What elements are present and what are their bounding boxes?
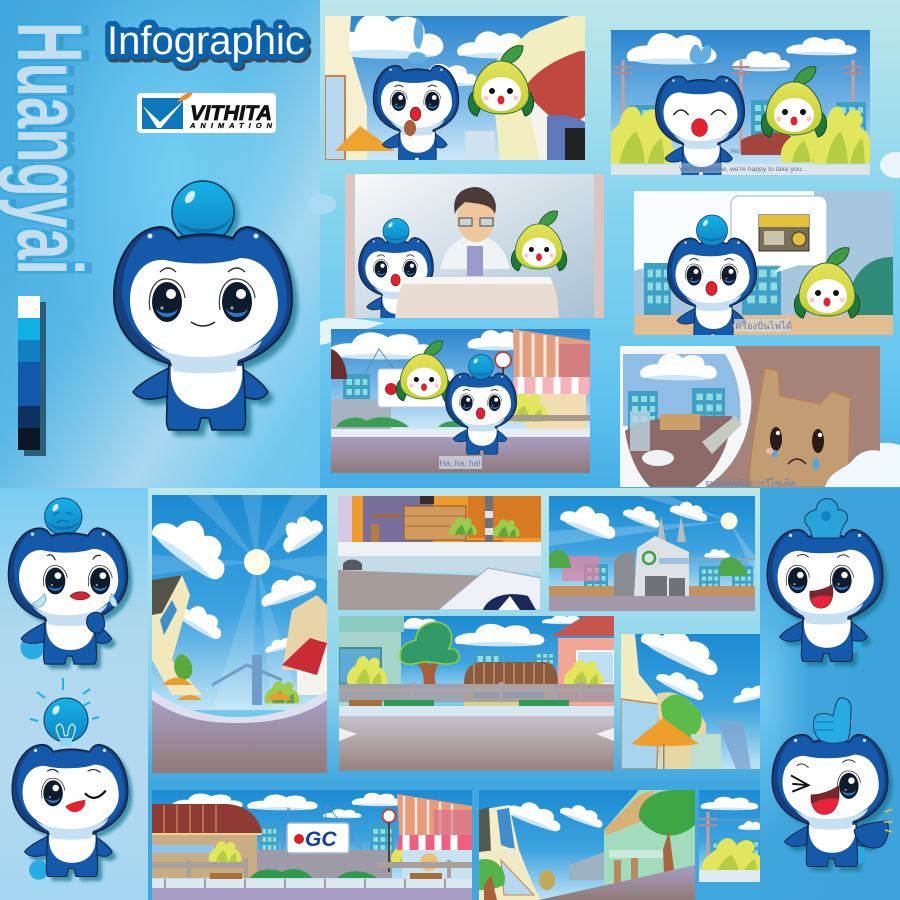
logo: Vithita Animation — [137, 92, 276, 133]
panel: scene 2 mascots waving with subtitle — [611, 30, 870, 175]
panel: background art 6 GC billboard street — [152, 790, 472, 900]
panel: background art 7 hillside street — [479, 790, 695, 900]
vertical title: Huangyai: Huangyai — [0, 22, 100, 275]
background: bottom right strip — [760, 488, 900, 900]
panel: scene 2 mascots waving with subtitle: You're welcome, we're happy to take you. — [679, 166, 803, 173]
heading: Infographic: Infographic — [109, 22, 307, 66]
logo: Vithita Animation: VITHITA — [190, 102, 272, 125]
panel: scene 4 generator speech bubble: เครื่องปั่นไฟได้ — [732, 319, 792, 332]
panel: scene 5 mascots laughing: Ha, ha, ha! — [439, 458, 481, 468]
decorative clouds on background — [308, 152, 900, 487]
heading: Infographic: Infographic — [107, 19, 305, 63]
panel: background art 8 pole and bush — [699, 790, 760, 882]
colour palette — [18, 296, 46, 456]
mascot: idea Huangyai with light bulb — [12, 678, 132, 881]
vertical title: Huangyai — [0, 22, 105, 276]
panel: background art 1 sky and sun — [152, 495, 327, 773]
mascot: thumbs up Huangyai — [772, 698, 892, 871]
panel: background art 5 building and umbrella — [621, 634, 760, 769]
background: top left panel — [0, 0, 320, 488]
panel: scene 2 mascots waving with subtitle: Yes. — [730, 148, 742, 155]
panel: scene 4 generator speech bubble — [634, 191, 893, 335]
panel: scene 3 presenter at desk — [345, 174, 604, 318]
panel: background art 2 street corner — [338, 496, 541, 610]
panel: scene 5 mascots laughing — [331, 329, 590, 473]
panel: scene 6 plastic bag and waste — [620, 346, 880, 489]
vertical title: Huangyai: Huangyai — [3, 23, 105, 276]
panel: background art 6 GC billboard street: GC — [305, 828, 337, 851]
panel: scene 1 mascots with ice cream — [325, 16, 585, 160]
background: bottom left strip — [0, 488, 148, 900]
logo: Vithita Animation: ANIMATION — [189, 121, 273, 130]
background: top right panel — [320, 0, 900, 488]
panel: background art 4 street with shops — [339, 616, 614, 771]
mascot: crying Huangyai — [8, 498, 132, 669]
mascot: cheerful Huangyai with flower — [767, 499, 887, 666]
main mascot: Huangyai — [114, 181, 298, 436]
panel: background art 3 recycling factory — [549, 496, 755, 611]
panel: scene 6 plastic bag and waste: จนไม่คุ้มกับการรีไซเคิล — [705, 478, 795, 489]
background: bottom centre — [148, 488, 760, 900]
